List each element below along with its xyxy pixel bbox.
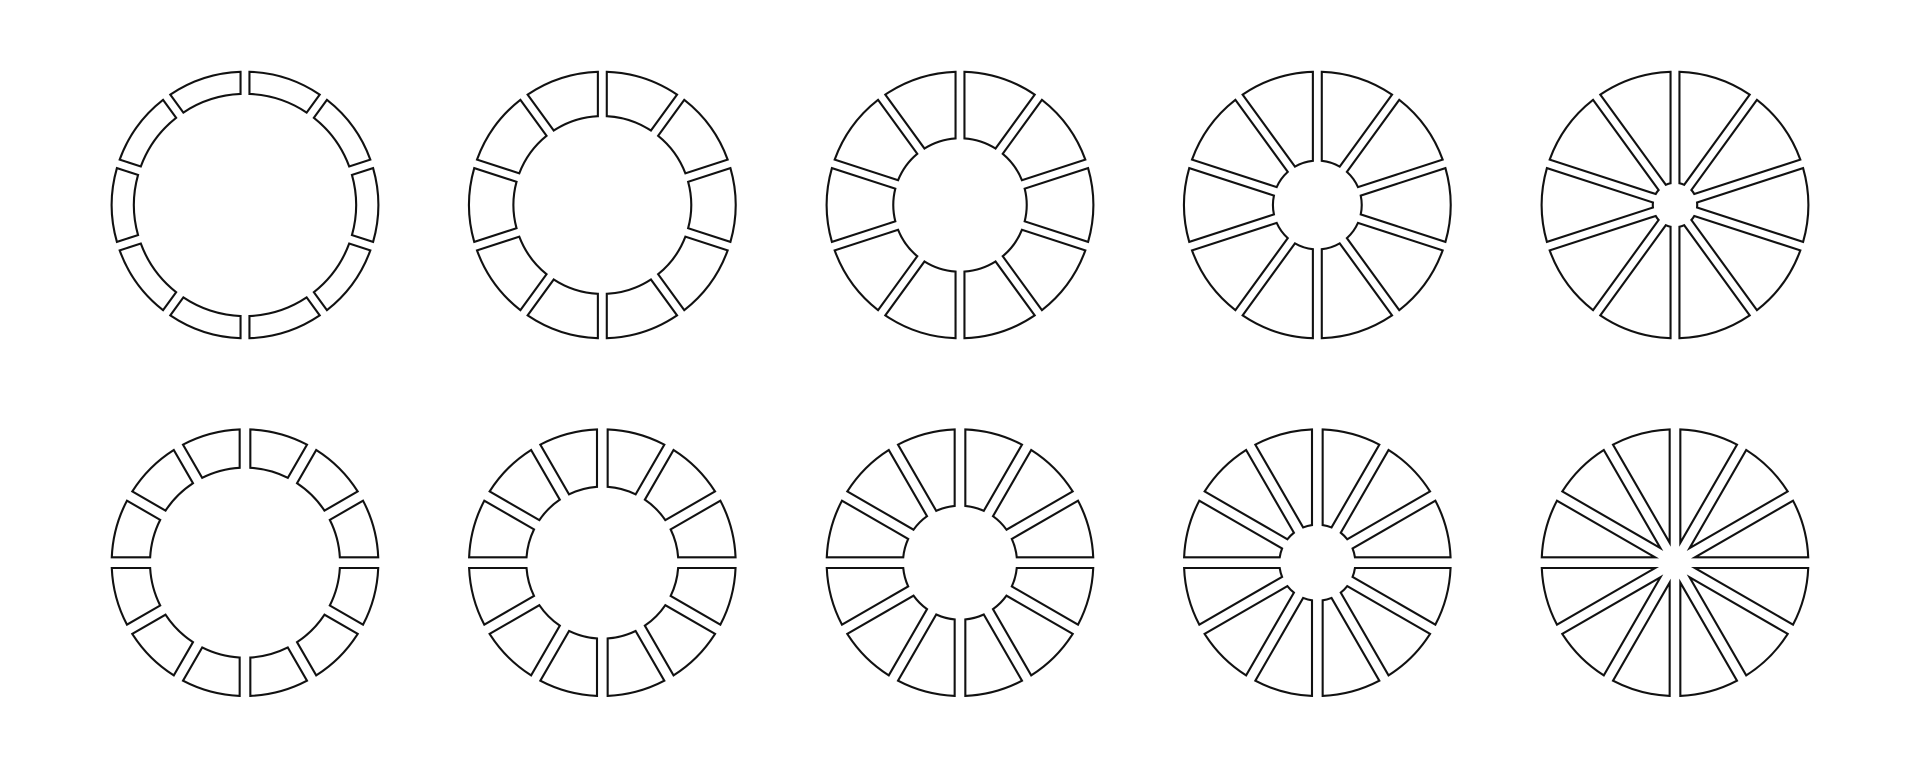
wheel: 12 segments, small hole: [1181, 426, 1454, 699]
wheel: 10 segments, half-radius hole: [827, 67, 1093, 343]
wheel: 12 segments, pointed wedges: [1539, 426, 1811, 699]
wheel: 10 segments, small hole: [1184, 67, 1451, 343]
wheel: 12 segments, medium-thin ring: [466, 426, 739, 699]
wheel: 12 segments, thin ring: [109, 426, 381, 699]
wheel: 10 segments, medium-thin ring: [469, 67, 736, 343]
wheel: 10 segments, tiny hole: [1542, 67, 1808, 343]
wheel: 12 segments, medium hole: [824, 426, 1096, 699]
wheel: 10 segments, thin ring: [112, 67, 378, 343]
